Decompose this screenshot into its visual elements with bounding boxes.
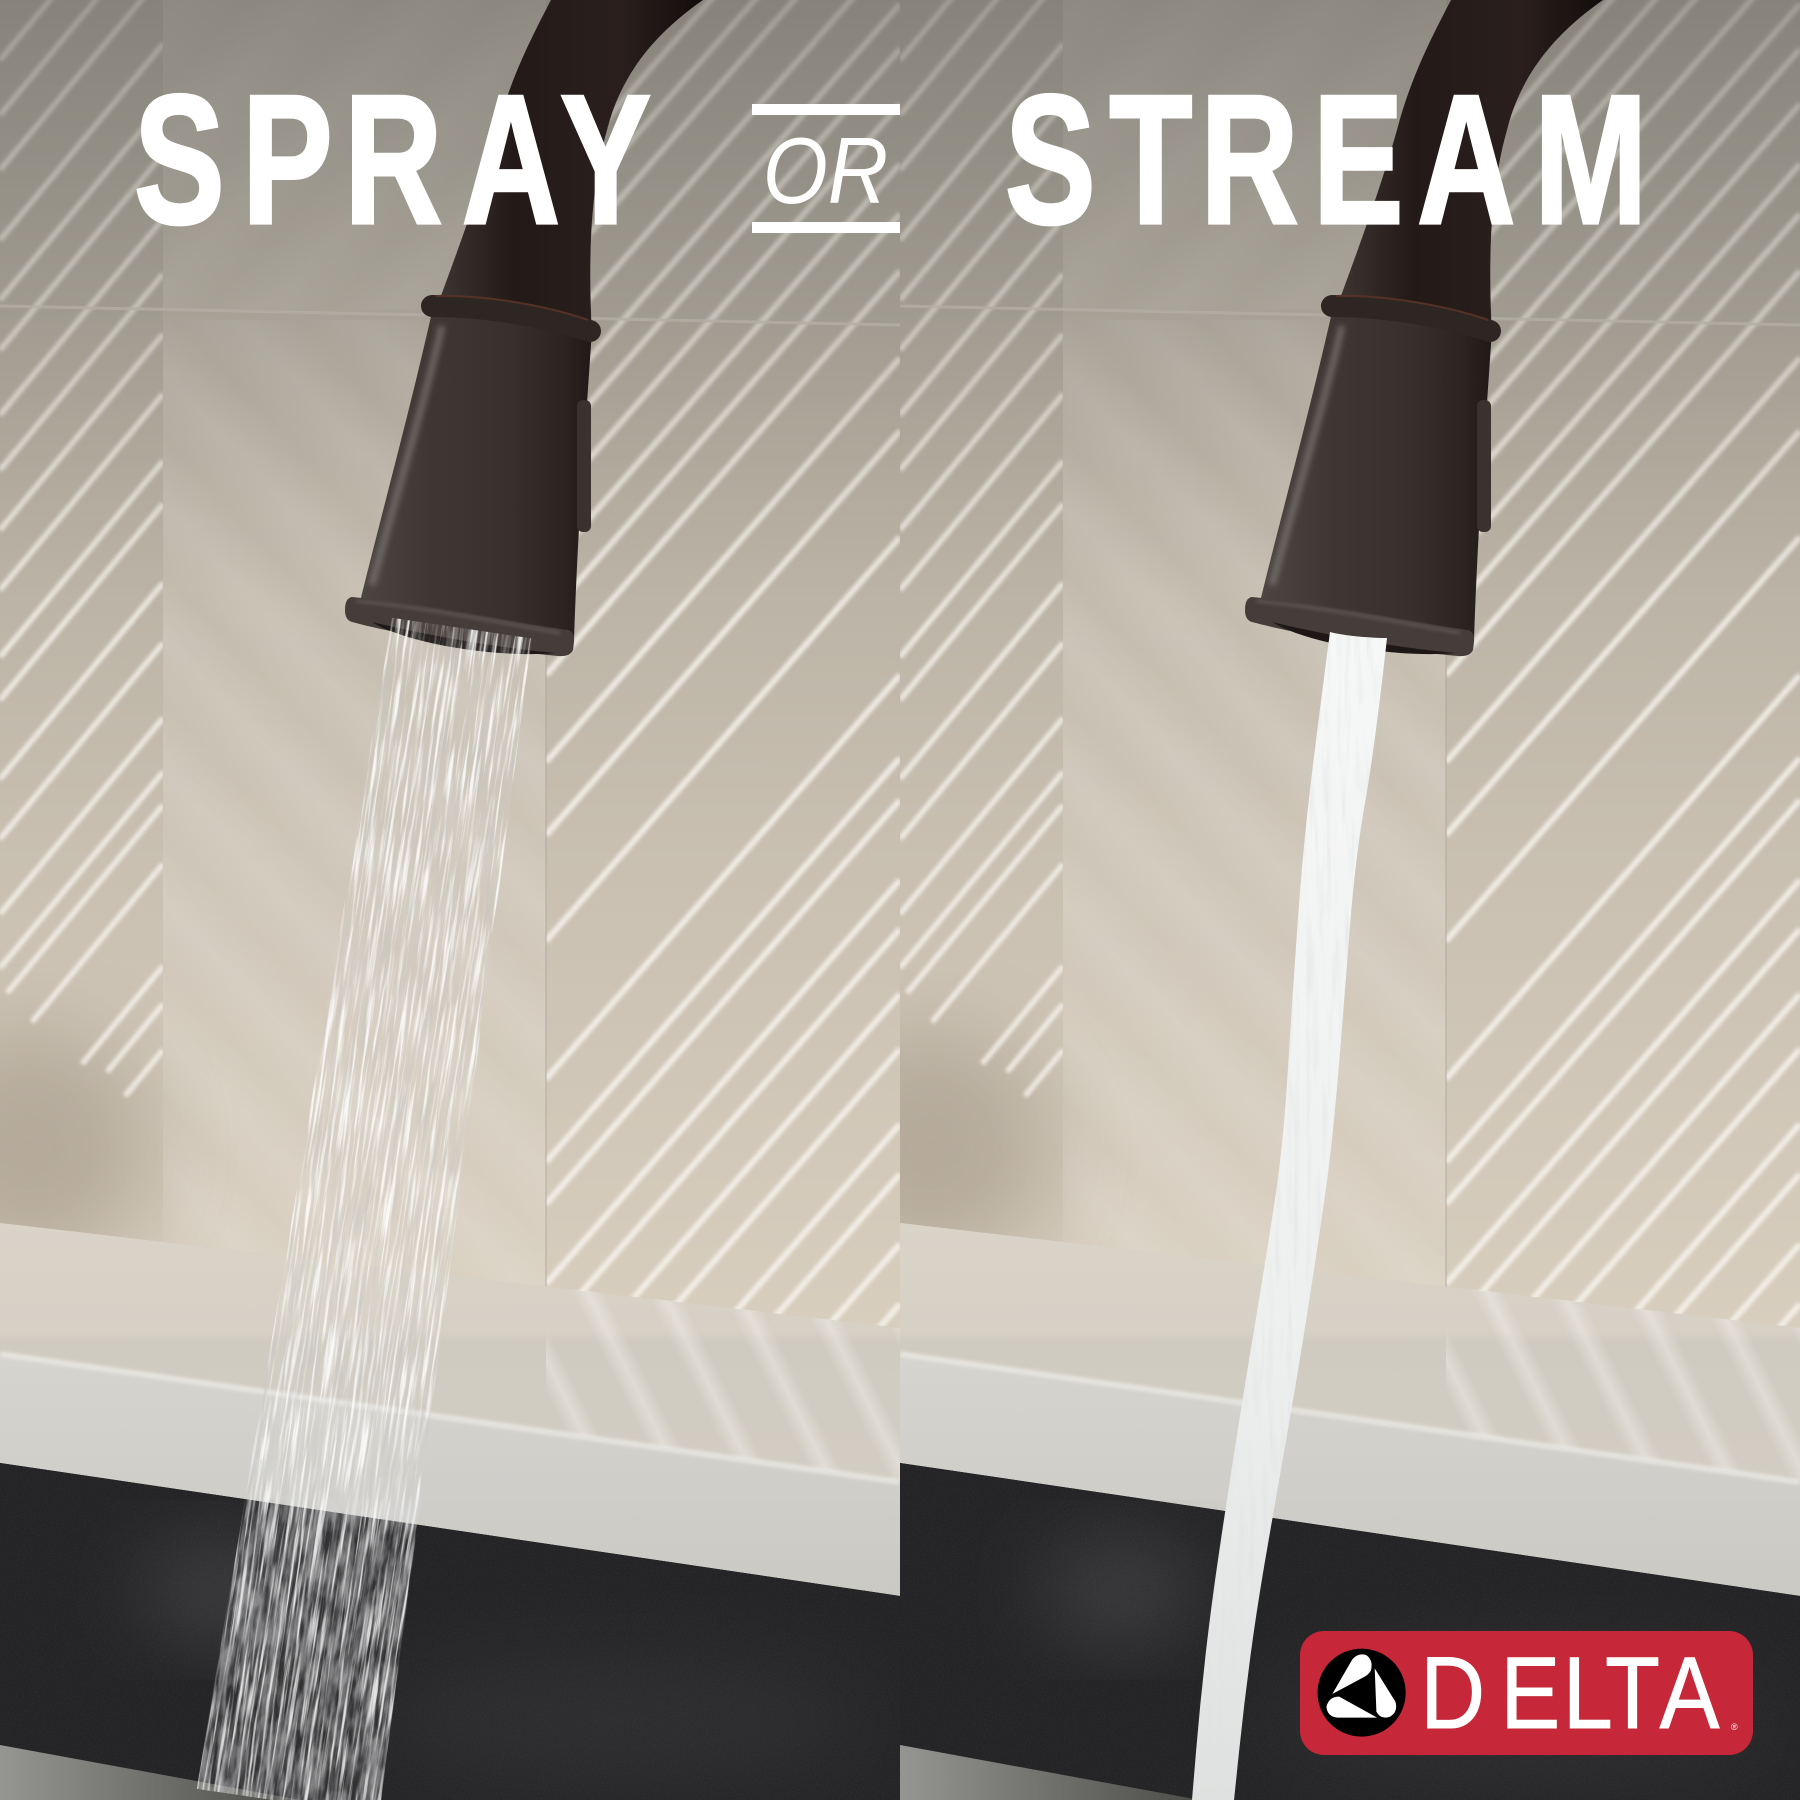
logo: Delta badge: ® <box>1731 1722 1738 1732</box>
panel: spray photo <box>0 0 900 1800</box>
divider heading: OR <box>752 104 900 233</box>
logo wordmark: DELTA <box>1420 1637 1720 1750</box>
stream water <box>1192 632 1387 1800</box>
icon: Delta triangle mark <box>1318 1649 1406 1737</box>
spray water <box>197 615 552 1800</box>
heading: SPRAY: SPRAY <box>134 57 651 263</box>
heading: STREAM: STREAM <box>1005 57 1647 263</box>
divider heading: OR: OR <box>763 117 888 223</box>
logo: Delta badge <box>1300 1631 1753 1755</box>
panel: stream photo <box>810 0 1800 1800</box>
